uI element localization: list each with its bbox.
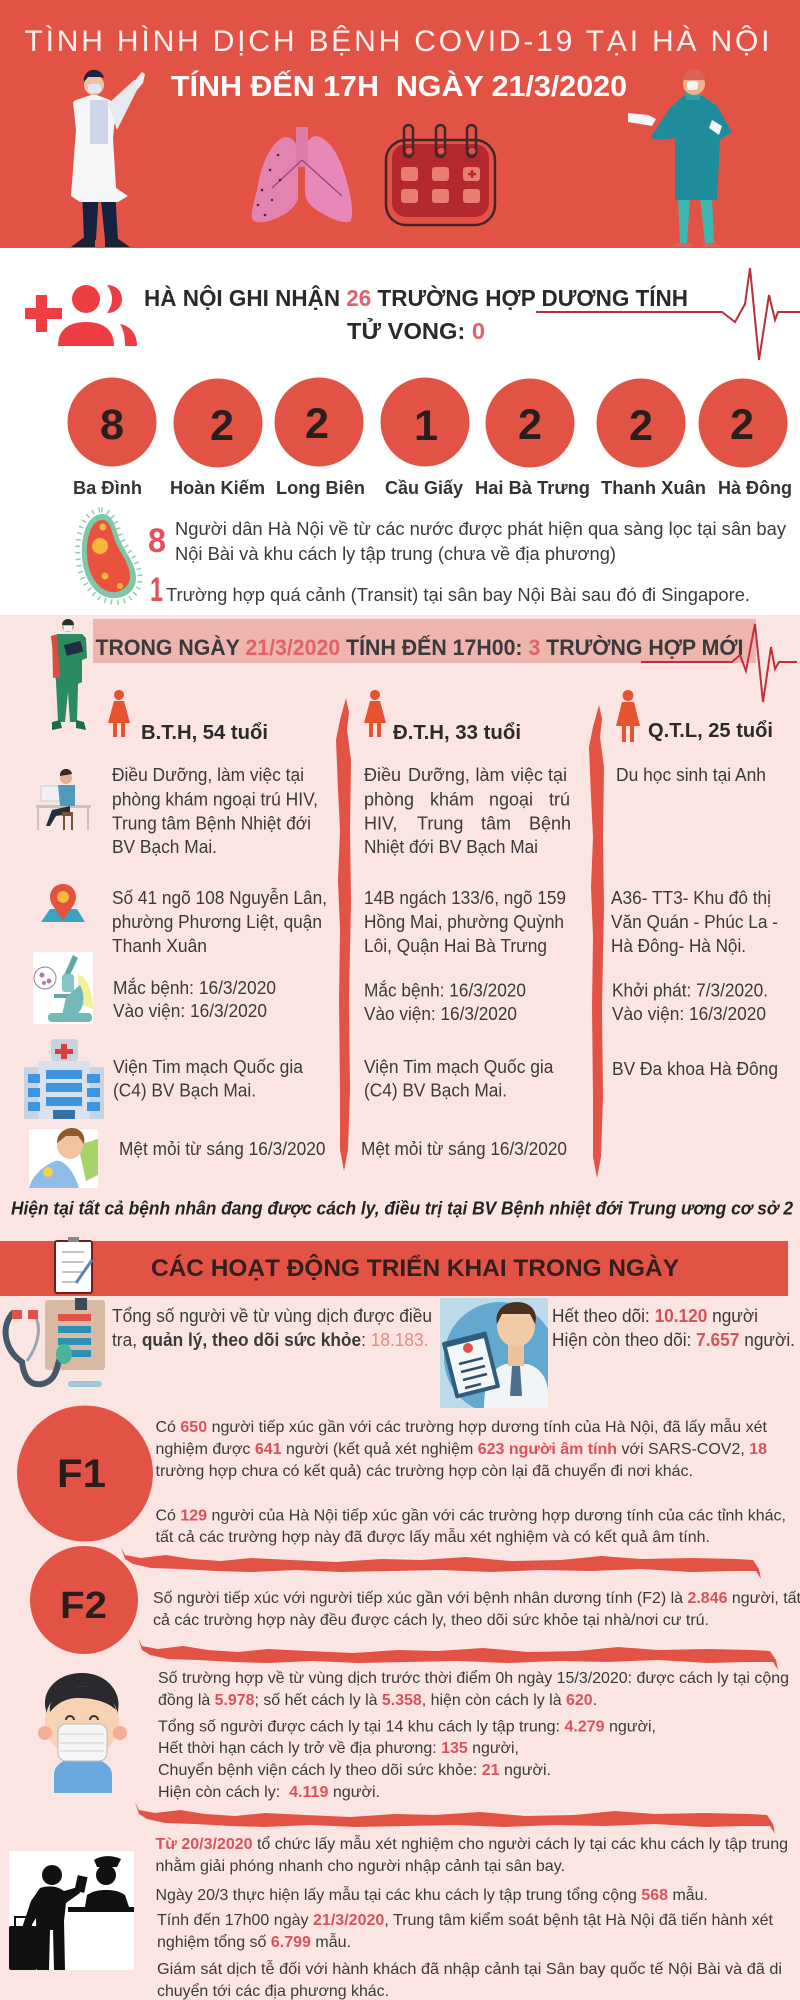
dates: Khởi phát: 7/3/2020. <box>612 980 768 1000</box>
icon: doctor in white coat <box>71 70 145 247</box>
text: testing: Từ 20/3/2020 tổ chức lấy mẫu xét nghiệm cho người cách ly tại các khu cách ly tập trung <box>156 1834 788 1853</box>
icon: stethoscope and chart <box>6 1298 105 1387</box>
address: Thanh Xuân <box>112 936 207 956</box>
job: Điều <box>364 765 401 785</box>
icon: microscope <box>33 952 93 1024</box>
dates <box>364 980 526 1024</box>
dates <box>612 980 768 1024</box>
F2 badge <box>30 1546 138 1654</box>
icon: doctor with clipboard <box>440 1298 548 1408</box>
F2 badge: F2 <box>60 1585 107 1627</box>
district counts: 2 <box>629 402 653 450</box>
text: F2 contacts <box>153 1590 800 1629</box>
text: F1 contacts: tất cả các trường hợp này đã được lấy mẫu xét nghiệm và có kết quả âm tính. <box>156 1527 710 1546</box>
stat: transit: 1 <box>150 571 163 609</box>
F1 badge: F1 <box>57 1452 106 1496</box>
F1 badge <box>17 1406 153 1542</box>
address: Văn Quán - Phúc La - <box>611 912 778 932</box>
district counts: 2 <box>210 402 234 450</box>
icon: sick person <box>29 1128 98 1188</box>
job: Trung tâm Bệnh Nhiệt đới <box>112 814 311 834</box>
text: testing: nghiệm tổng số 6.799 mẫu. <box>157 1932 351 1951</box>
icon: person with mask <box>38 1673 127 1793</box>
district counts: 1 <box>414 402 438 450</box>
address: A36- TT3- Khu đô thị <box>611 888 771 908</box>
text: monitoring status: Hết theo dõi: 10.120 người <box>552 1306 758 1326</box>
job: việc <box>511 765 543 785</box>
job: phòng <box>364 790 414 810</box>
district counts: 2 <box>305 400 329 448</box>
job: trú <box>549 790 570 810</box>
hospital: Viện Tim mạch Quốc gia <box>364 1057 554 1077</box>
case 2 <box>361 690 571 1159</box>
heading: positive cases: HÀ NỘI GHI NHẬN 26 TRƯỜNG HỢP DƯƠNG TÍNH <box>144 284 688 311</box>
text: total monitored <box>112 1306 432 1350</box>
stat: returnees: 8 <box>148 522 166 560</box>
heading text: CÁC HOẠT ĐỘNG TRIỂN KHAI TRONG NGÀY <box>151 1254 679 1282</box>
icon: heartbeat line <box>641 624 797 702</box>
district counts: Hà Đông <box>718 478 792 498</box>
job: Bệnh <box>529 814 571 834</box>
icon: lungs <box>252 127 352 222</box>
text: testing <box>156 1834 788 2000</box>
heading bar <box>0 1241 788 1296</box>
symptom: Mệt mỏi từ sáng 16/3/2020 <box>119 1139 326 1159</box>
case name: Đ.T.H, 33 tuổi <box>393 722 521 744</box>
district counts: Ba Đình <box>73 478 142 498</box>
icon: virus <box>78 510 140 602</box>
dates: Mắc bệnh: 16/3/2020 <box>364 980 526 1000</box>
dates: Vào viện: 16/3/2020 <box>364 1004 517 1024</box>
job: khám <box>430 790 474 810</box>
text: testing: nhằm giải phóng nhanh cho người nhập cảnh tại sân bay. <box>156 1856 565 1875</box>
job <box>112 765 318 857</box>
job: HIV, <box>364 814 397 834</box>
job <box>364 765 571 857</box>
address: Số 41 ngõ 108 Nguyễn Lân, <box>112 887 327 908</box>
dates <box>113 977 276 1021</box>
address: Hà Đông- Hà Nội. <box>611 936 746 956</box>
dates: Vào viện: 16/3/2020 <box>113 1001 267 1021</box>
address <box>364 888 566 956</box>
text: testing: Giám sát dịch tễ đối với hành khách đã nhập cảnh tại Sân bay quốc tế Nội Bài và đã di <box>157 1959 782 1978</box>
text: monitoring status: Hiện còn theo dõi: 7.657 người. <box>552 1330 795 1350</box>
heading: deaths: TỬ VONG: 0 <box>347 316 485 344</box>
icon: airport check-in <box>9 1851 134 1970</box>
hospital <box>113 1057 304 1100</box>
case name: B.T.H, 54 tuổi <box>141 722 268 744</box>
icon: office worker <box>36 769 91 830</box>
district counts: 8 <box>100 401 124 449</box>
text: quarantine: Hiện còn cách ly: 4.119 người. <box>158 1784 380 1801</box>
job: phòng khám ngoại trú HIV, <box>112 790 318 810</box>
hospital: (C4) BV Bạch Mai. <box>364 1080 507 1100</box>
stat: transit: Trường hợp quá cảnh (Transit) tại sân bay Nội Bài sau đó đi Singapore. <box>166 585 750 605</box>
job: Điều Dưỡng, làm việc tại <box>112 765 304 785</box>
text: F1 contacts <box>156 1417 786 1546</box>
hospital: Viện Tim mạch Quốc gia <box>113 1057 304 1077</box>
text: testing: Tính đến 17h00 ngày 21/3/2020, Trung tâm kiểm soát bệnh tật Hà Nội đã tiến hành xét <box>157 1911 774 1929</box>
district counts: Hai Bà Trưng <box>475 478 590 498</box>
district counts: Thanh Xuân <box>601 478 706 498</box>
icon: map pin <box>41 884 85 922</box>
address: Hồng Mai, phường Quỳnh <box>364 912 564 932</box>
text: quarantine: đồng là 5.978; số hết cách ly là 5.358, hiện còn cách ly là 620. <box>158 1692 597 1709</box>
stat: returnees: Nội Bài và khu cách ly tập trung (chưa về địa phương) <box>175 544 616 564</box>
icon: calendar <box>386 125 495 225</box>
address <box>611 888 778 956</box>
text: F2 contacts: Số người tiếp xúc với người tiếp xúc gần với bệnh nhân dương tính (F2) là 2.846 người, tất <box>153 1590 800 1607</box>
address: 14B ngách 133/6, ngõ 159 <box>364 888 566 908</box>
text: quarantine: Tổng số người được cách ly tại 14 khu cách ly tập trung: 4.279 người, <box>158 1718 656 1736</box>
district counts: Hoàn Kiếm <box>170 478 265 498</box>
text: quarantine: Chuyển bệnh viện cách ly theo dõi sức khỏe: 21 người. <box>158 1761 551 1779</box>
symptom: Mệt mỏi từ sáng 16/3/2020 <box>361 1139 567 1159</box>
job: ngoại <box>489 790 533 810</box>
title: TÌNH HÌNH DỊCH BỆNH COVID-19 TẠI HÀ NỘI <box>24 24 770 58</box>
note: isolation: Hiện tại tất cả bệnh nhân đang được cách ly, điều trị tại BV Bệnh nhiệt đới Trung ương cơ sở 2 <box>11 1198 793 1218</box>
district counts: Long Biên <box>276 478 365 498</box>
divider brush 3 <box>135 1802 775 1834</box>
case 1 <box>108 690 327 1159</box>
address <box>112 887 327 956</box>
job: Trung <box>417 814 463 834</box>
text: testing: chuyển tới các địa phương khác. <box>157 1982 389 2000</box>
hospital <box>364 1057 554 1100</box>
icon: woman <box>108 690 130 737</box>
heading bar <box>93 619 756 663</box>
text: F1 contacts: Có 650 người tiếp xúc gần với các trường hợp dương tính của Hà Nội, đã lấy mẫu xét <box>156 1417 768 1436</box>
stat: transit <box>150 571 750 609</box>
job: tâm <box>481 814 511 834</box>
divider brush 1 <box>121 1547 761 1579</box>
stat: returnees <box>148 519 786 564</box>
case 3 <box>611 690 778 1079</box>
district counts: 2 <box>518 401 542 449</box>
text: monitoring status <box>552 1306 795 1350</box>
text: total monitored: Tổng số người về từ vùng dịch được điều <box>112 1306 432 1326</box>
district counts: 2 <box>730 401 754 449</box>
text: testing: Ngày 20/3 thực hiện lấy mẫu tại các khu cách ly tập trung tổng cộng 568 mẫu. <box>156 1885 708 1904</box>
subtitle: TÍNH ĐẾN 17H NGÀY 21/3/2020 <box>171 69 627 103</box>
text: F2 contacts: cả các trường hợp này đều được cách ly, theo dõi sức khỏe tại nhà/nơi cư trú. <box>153 1612 709 1629</box>
hospital: BV Đa khoa Hà Đông <box>612 1059 778 1079</box>
heading text: TRONG NGÀY 21/3/2020 TÍNH ĐẾN 17H00: 3 TRƯỜNG HỢP MỚI <box>96 635 744 660</box>
panel: summary <box>25 268 800 609</box>
panel: new cases <box>11 619 797 1218</box>
text: F1 contacts: nghiệm được 641 người (kết quả xét nghiệm 623 người âm tính với SARS-COV2, 18 <box>156 1441 767 1458</box>
text: F1 contacts: trường hợp chưa có kết quả) các trường hợp còn lại đã chuyển đi nơi khác. <box>156 1462 693 1480</box>
job: Du học sinh tại Anh <box>616 765 766 785</box>
district counts <box>68 378 792 498</box>
address: Lôi, Quận Hai Bà Trưng <box>364 936 547 956</box>
dividers <box>336 698 604 1178</box>
text: F1 contacts: Có 129 người của Hà Nội tiếp xúc gần với các trường hợp dương tính của các tỉnh khác, <box>156 1508 786 1524</box>
address: phường Phương Liệt, quận <box>112 912 322 932</box>
icon: checklist clipboard <box>55 1237 92 1293</box>
divider brush 2 <box>138 1638 778 1670</box>
dates: Vào viện: 16/3/2020 <box>612 1004 766 1024</box>
job: Dưỡng, <box>408 765 470 785</box>
text: quarantine: Số trường hợp về từ vùng dịch trước thời điểm 0h ngày 15/3/2020: được cách ly tại cộng <box>158 1669 789 1687</box>
job: tại <box>548 765 567 785</box>
job: làm <box>476 765 505 785</box>
icon: woman <box>616 690 640 742</box>
dates: Mắc bệnh: 16/3/2020 <box>113 977 276 998</box>
panel: header <box>0 0 800 248</box>
icon: nurse <box>51 619 87 730</box>
text: quarantine <box>158 1669 789 1801</box>
icon: patients plus <box>25 285 137 346</box>
icon: hospital building <box>24 1039 104 1119</box>
stat: returnees: Người dân Hà Nội về từ các nước được phát hiện qua sàng lọc tại sân bay <box>175 519 786 539</box>
district counts: Cầu Giấy <box>385 478 463 498</box>
text: total monitored: tra, quản lý, theo dõi sức khỏe: 18.183. <box>112 1330 428 1350</box>
hospital: (C4) BV Bạch Mai. <box>113 1080 256 1100</box>
icon: woman <box>364 690 386 737</box>
case name: Q.T.L, 25 tuổi <box>648 720 773 742</box>
job: BV Bạch Mai. <box>112 837 217 857</box>
icon: surgeon in gown <box>628 69 732 247</box>
icon: heartbeat line <box>536 268 800 360</box>
job: Nhiệt đới BV Bạch Mai <box>364 837 538 857</box>
panel: activities <box>0 1237 800 2000</box>
text: quarantine: Hết thời hạn cách ly trở về địa phương: 135 người, <box>158 1740 519 1757</box>
